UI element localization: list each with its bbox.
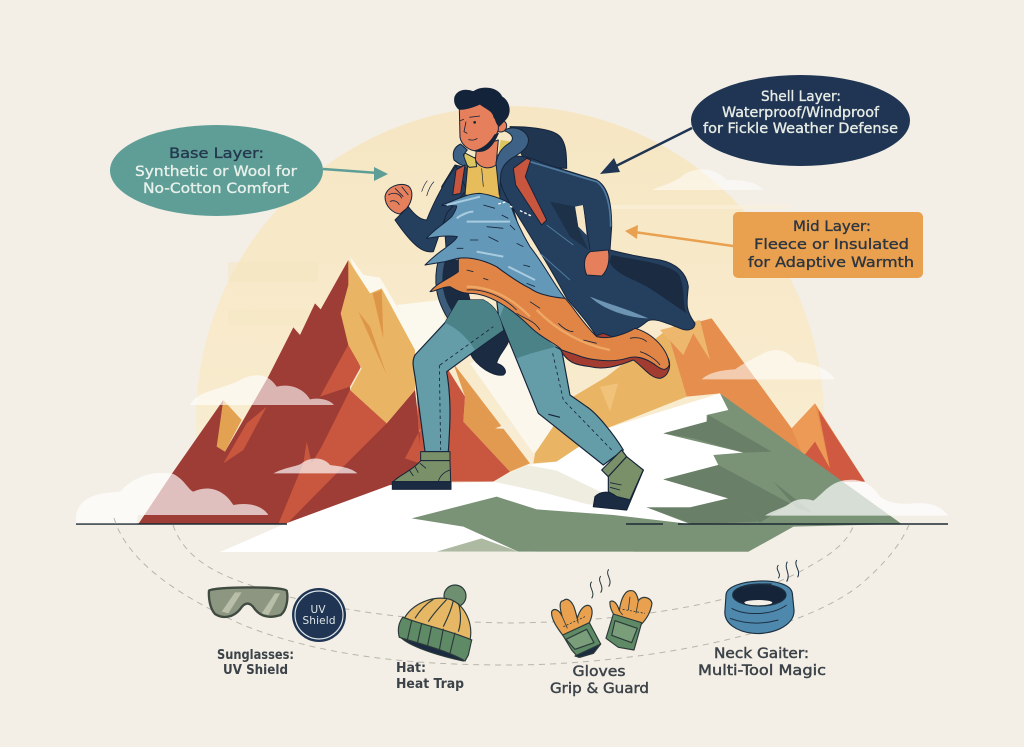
label: hat [396,661,464,692]
icon: UV shield badge [292,588,346,642]
left mountain range [138,257,530,524]
snowy foreground slope [220,393,902,552]
left collar [463,153,477,167]
stitching [439,327,613,452]
callout: mid layer: Fleece or Insulated [754,237,909,253]
callout: shell layer: Waterproof/Windproof [722,105,880,121]
clouds [76,169,948,523]
label: neck gaiter: Multi-Tool Magic [698,663,826,679]
callout: mid layer: for Adaptive Warmth [748,255,914,271]
callout: base layer [110,125,388,216]
straps [453,165,465,195]
left hood lapel [453,144,467,166]
right hand [584,250,609,276]
front boot [392,452,451,489]
left glove [552,599,592,636]
lower green field [412,497,793,552]
label: hat: Heat Trap [396,677,464,692]
fist [385,184,412,214]
shirt [465,155,500,200]
label: gloves [550,664,649,697]
cloud: lower right [765,480,948,516]
callout: base layer: Synthetic or Wool for [135,164,297,180]
dashed accessory orbit paths [114,518,911,665]
label: sunglasses: Sunglasses: [217,648,294,663]
coat back panels [436,260,510,375]
mid layer fleece [430,258,669,369]
front leg [413,300,503,452]
hiker figure [385,88,695,510]
callout: shell layer [600,75,910,174]
icon: neck gaiter [725,560,799,634]
beard line [475,133,498,151]
label: gloves: Gloves [572,664,626,680]
label: neck gaiter [698,646,826,679]
hair [455,88,509,126]
icon: goggles [209,587,287,617]
ground line [76,523,948,525]
icon: gloves [552,569,652,657]
head [459,104,498,151]
right mountain range [397,300,865,482]
cloud: upper right [702,350,835,379]
callout: base layer: No-Cotton Comfort [143,181,289,197]
icon: UV shield badge: Shield [302,615,336,627]
ridge shadows [647,415,813,524]
cloud: middle left [273,459,357,473]
callout: mid layer: Mid Layer: [793,219,871,235]
sun disc [196,106,824,483]
infographic canvas [76,75,948,696]
wrap highlights [447,197,535,280]
motion lines [422,181,434,196]
label: sunglasses: UV Shield [223,663,288,678]
snow shading [493,465,640,512]
green ridge [633,393,902,552]
right hood [496,128,528,195]
upper body [385,88,695,378]
torso left [442,165,517,257]
wrap marks [457,205,535,287]
back leg [497,300,623,465]
fleece highlights [467,287,610,350]
neck [475,140,498,168]
cloud: top right [652,169,763,190]
label: neck gaiter: Neck Gaiter: [714,646,809,662]
left arm [395,166,467,252]
callout: mid layer [625,212,923,278]
backpack [510,127,567,168]
callout: base layer: Base Layer: [169,146,264,162]
right glove [610,591,652,625]
right collar [498,140,512,155]
steam [590,569,610,598]
coat main [497,156,695,338]
white snow [220,393,743,552]
arm gap [575,205,587,235]
callout: shell layer: for Fickle Weather Defense [703,121,898,137]
ear [495,120,507,132]
under-arm shadow [550,202,588,250]
pale green patch [437,538,518,552]
legs [413,300,643,510]
label: sunglasses [217,648,294,678]
cloud: upper left [190,375,334,405]
cloud: lower left [76,473,268,523]
icon: beanie hat [398,585,472,661]
icon: UV shield badge: UV [310,604,326,616]
callout: shell layer: Shell Layer: [761,89,841,105]
coat highlights [590,297,648,318]
face details [460,116,480,140]
fleece marks [467,270,660,365]
base layer water-like wrap [425,193,565,298]
label: gloves: Grip & Guard [550,681,649,697]
coat tail shadow [609,255,687,313]
arm seam [583,205,590,250]
lower tail shadow [560,333,670,378]
back boot [602,450,627,477]
label: hat: Hat: [396,661,426,676]
